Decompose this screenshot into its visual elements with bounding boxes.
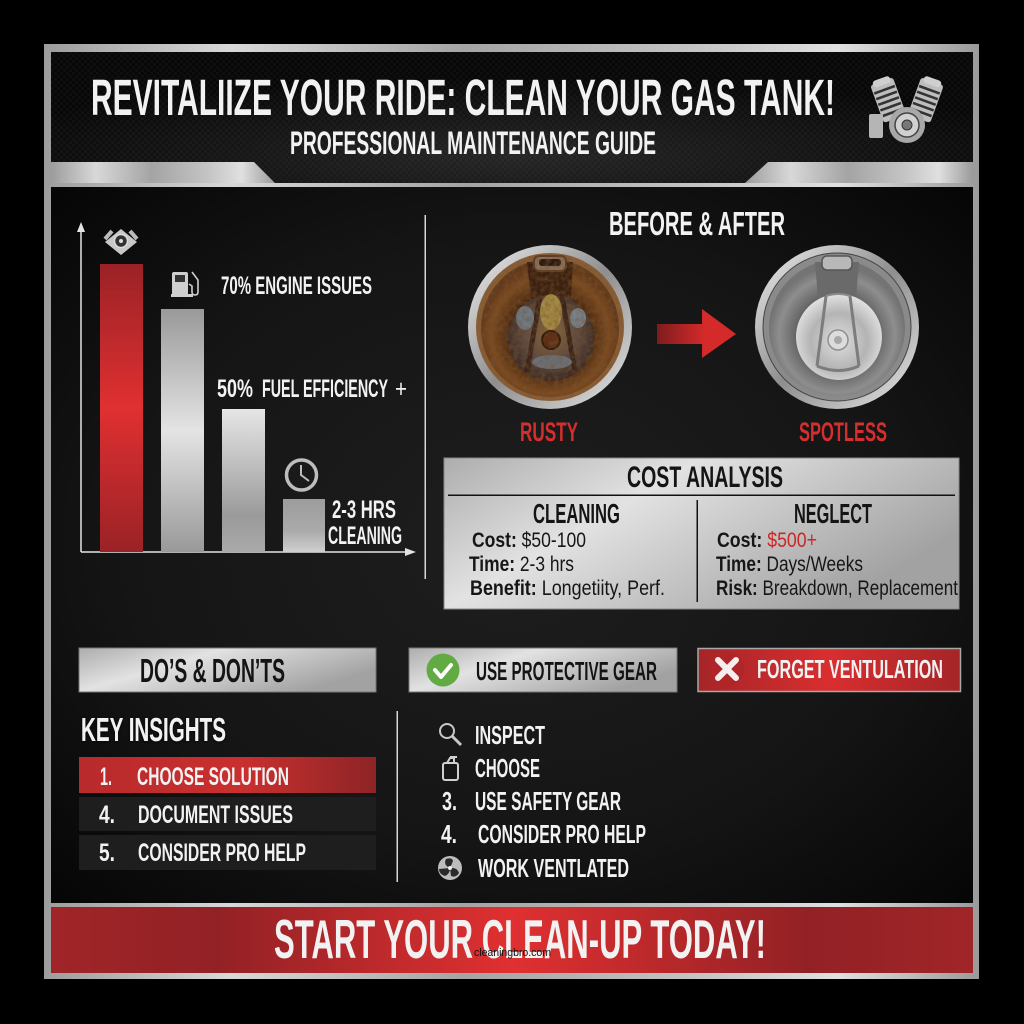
label: rusty: RUSTY bbox=[520, 417, 578, 447]
column: neglect: Cost: $500+ bbox=[717, 529, 817, 552]
heading: cost analysis: COST ANALYSIS bbox=[627, 461, 783, 494]
step: consider pro help bbox=[441, 819, 646, 849]
column: cleaning: Benefit: Longetiity, Perf. bbox=[470, 577, 665, 600]
panel: header bbox=[51, 52, 973, 183]
step: use safety gear bbox=[442, 786, 621, 816]
panel: steps list bbox=[438, 720, 646, 883]
subtitle: PROFESSIONAL MAINTENANCE GUIDE bbox=[290, 125, 656, 161]
step: inspect: INSPECT bbox=[475, 720, 545, 750]
label: 50% fuel efficiency bbox=[217, 375, 407, 403]
left silver tab bbox=[51, 162, 275, 183]
chart axes bbox=[81, 228, 408, 552]
row: document issues: 4. bbox=[99, 801, 115, 829]
column: neglect bbox=[716, 498, 958, 600]
bar: fuel efficiency top bbox=[161, 309, 204, 552]
step: choose: CHOOSE bbox=[475, 753, 540, 783]
right silver tab bbox=[745, 162, 973, 183]
label: 2-3 hrs cleaning bbox=[328, 496, 402, 550]
panel: before and after bbox=[468, 205, 919, 447]
panel: bar chart bbox=[77, 222, 416, 556]
step: use safety gear: 3. bbox=[442, 786, 457, 816]
row: document issues: DOCUMENT ISSUES bbox=[138, 801, 293, 829]
step: work ventilated bbox=[438, 853, 629, 883]
panel: do - use protective gear bbox=[409, 648, 677, 692]
panel: do - use protective gear: USE PROTECTIVE GEAR bbox=[476, 656, 657, 686]
image: rusty tank bbox=[468, 245, 632, 409]
column: cleaning: Cost: $50-100 bbox=[472, 529, 586, 552]
step: use safety gear: USE SAFETY GEAR bbox=[475, 786, 621, 816]
column: cleaning bbox=[469, 498, 665, 600]
icon: fuel pump bbox=[171, 272, 198, 297]
column: cleaning: CLEANING bbox=[533, 498, 620, 529]
arrow: before to after bbox=[657, 309, 736, 358]
step: work ventilated: WORK VENTLATED bbox=[478, 853, 629, 883]
heading: key insights: KEY INSIGHTS bbox=[81, 711, 226, 748]
icon: red cross bbox=[710, 652, 744, 686]
panel: call to action bbox=[51, 907, 973, 973]
step: choose bbox=[443, 753, 540, 783]
panel: main content background bbox=[51, 187, 973, 903]
label: 50% fuel efficiency: FUEL EFFICIENCY bbox=[262, 375, 388, 403]
label: 2-3 hrs cleaning: 2-3 HRS bbox=[332, 496, 396, 524]
column: neglect: Time: Days/Weeks bbox=[716, 553, 863, 576]
column: cleaning: Time: 2-3 hrs bbox=[469, 553, 574, 576]
label: spotless: SPOTLESS bbox=[799, 417, 887, 447]
column: neglect: Risk: Breakdown, Replacement bbox=[716, 577, 958, 600]
image: spotless tank bbox=[755, 245, 919, 409]
row: choose solution bbox=[79, 757, 376, 793]
row: consider pro help: 5. bbox=[99, 839, 115, 867]
icon: clock bbox=[286, 460, 316, 490]
divider: insights and steps bbox=[396, 711, 398, 882]
panel: do's and don'ts heading: DO’S & DON’TS bbox=[140, 652, 285, 689]
panel: key insights bbox=[79, 711, 376, 870]
bar: engine issues bbox=[100, 264, 143, 552]
label: 2-3 hrs cleaning: CLEANING bbox=[328, 522, 402, 550]
panel: cost analysis bbox=[444, 458, 959, 609]
panel: do's and don'ts heading bbox=[79, 648, 376, 692]
icon: v-twin engine bbox=[869, 74, 945, 143]
step: consider pro help: CONSIDER PRO HELP bbox=[478, 819, 646, 849]
row: choose solution: 1. bbox=[100, 763, 112, 791]
icon: engine bbox=[105, 229, 137, 255]
bar: cleaning time bbox=[283, 499, 325, 552]
row: consider pro help: CONSIDER PRO HELP bbox=[138, 839, 306, 867]
divider: chart and comparison bbox=[424, 215, 426, 579]
watermark: cleaningbro.com bbox=[474, 947, 551, 959]
column: neglect: NEGLECT bbox=[794, 498, 872, 529]
row: document issues bbox=[79, 797, 376, 831]
row: consider pro help bbox=[79, 835, 376, 870]
panel: don't - forget ventilation bbox=[698, 648, 960, 692]
step: inspect bbox=[440, 720, 545, 750]
label: 70% engine issues: 70% ENGINE ISSUES bbox=[221, 272, 372, 300]
heading: before and after: BEFORE & AFTER bbox=[609, 205, 785, 242]
label: 50% fuel efficiency: + bbox=[395, 375, 407, 403]
label: 50% fuel efficiency: 50% bbox=[217, 375, 253, 403]
row: choose solution: CHOOSE SOLUTION bbox=[137, 763, 289, 791]
icon: green check bbox=[426, 654, 460, 686]
step: consider pro help: 4. bbox=[441, 819, 457, 849]
bar: fuel efficiency bbox=[222, 409, 265, 552]
